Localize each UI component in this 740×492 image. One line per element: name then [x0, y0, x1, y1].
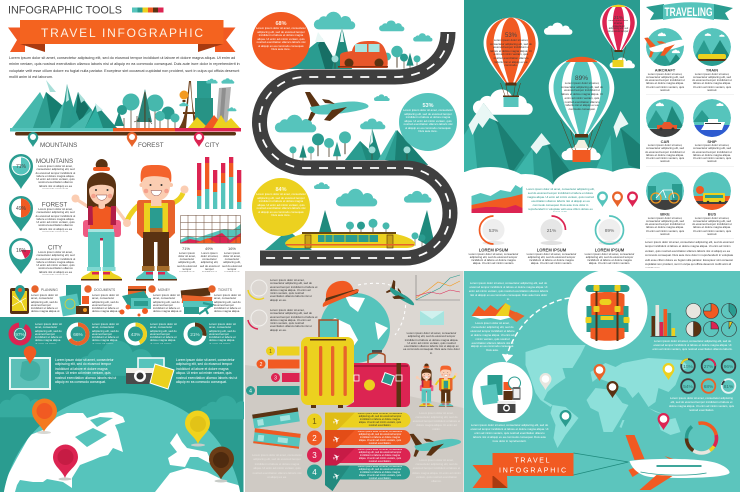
icon: plane: [305, 92, 369, 121]
bar chart: [650, 305, 676, 337]
legend: forest: FOREST: [138, 142, 164, 149]
balloon: 53%: [483, 18, 538, 107]
step 3: [307, 448, 411, 468]
item: planning: PLANNING: [41, 288, 58, 292]
horizontal bar 1: [266, 346, 300, 356]
icon: passports: [59, 285, 89, 316]
panel: balloons: [464, 0, 640, 265]
colour swatch bar: [132, 8, 164, 12]
horizontal bar 2: 2: [260, 362, 263, 368]
label: aircraft: AIRCRAFT: [655, 68, 676, 72]
mini area chart: [471, 303, 524, 322]
icon: train: [285, 232, 415, 248]
heading: forest: FOREST: [42, 202, 67, 208]
panel: luggage and tips: [245, 271, 464, 492]
donut grid: 81%: [723, 384, 734, 390]
horizontal bar 1: 1: [269, 349, 272, 355]
icon: framed map with pin: [10, 346, 50, 389]
donut grid: [681, 359, 735, 393]
map pin: orange: [612, 191, 622, 207]
text block: lower left: Lorem ipsum dolor sit amet, consectetur adipiscing elit, sed do eiusmod tempor incididunt ut labore et dolore magna aliqua. Ut enim ad minim veniam, quis nostrud exercitation ullamco laboris nisi ut aliquip ex ea.: [252, 453, 302, 479]
pin chart: forest 49%: 49%: [16, 206, 27, 212]
icon circle: aircraft: [644, 28, 684, 66]
caption: first lorem ipsum: [468, 248, 518, 270]
illustration: middle scenery: [275, 94, 428, 165]
illustration: globe: [0, 393, 245, 492]
dial: 53%: [479, 216, 504, 245]
illustration: top scenery: [283, 12, 432, 69]
item: documents: [84, 285, 121, 314]
item: money: [148, 285, 182, 314]
title ribbon: [8, 20, 236, 52]
panel: road journey: [252, 12, 458, 266]
info circle: 68%: [252, 12, 310, 70]
icon: airliner: [410, 430, 462, 457]
road: [260, 32, 450, 258]
horizontal bar 4: 4: [249, 388, 252, 394]
section: teal world panel: [0, 317, 255, 492]
icon: small plane: [384, 280, 418, 311]
area chart: [471, 185, 522, 213]
progress ring: yellow: [248, 280, 267, 299]
pie grid: [686, 304, 736, 336]
dial: 21%: 21%: [546, 228, 557, 234]
icon: yellow suitcase: [301, 320, 354, 408]
step 3: 3: [312, 451, 317, 460]
info circle: 84%: [252, 178, 310, 236]
pin chart: mountains 71%: [9, 154, 33, 189]
icon circle: ship: [693, 99, 731, 137]
dial: 21%: [540, 216, 565, 245]
caption: second lorem ipsum: LOREM IPSUM: [536, 248, 566, 252]
legend: city: [194, 132, 220, 149]
traveling ribbon: TRAVELING: [664, 7, 713, 19]
donut: 97%: 97%: [15, 332, 26, 338]
icon: red suitcase: [346, 350, 410, 407]
caption: first lorem ipsum: LOREM IPSUM: [478, 248, 508, 252]
label: bike: BIKE: [660, 212, 670, 216]
travel infographic banner: INFOGRAPHIC: [498, 468, 566, 474]
illustration: two travellers: [72, 159, 188, 280]
donut grid: 96%: [723, 364, 734, 370]
stat: 16%: 16%: [228, 246, 236, 251]
map pin: yellow: [185, 410, 210, 446]
donut: 21%: [186, 324, 204, 344]
heading: infographic tools: INFOGRAPHIC TOOLS: [8, 4, 122, 16]
info circle: 84%: 84%: [275, 187, 287, 193]
item: planning: [31, 285, 61, 314]
item: money: MONEY: [158, 288, 171, 292]
area chart with grid: [180, 215, 241, 244]
map pin: yellow: [662, 363, 674, 380]
balloon: 53%: 53%: [504, 33, 517, 39]
map pin: orange: [593, 364, 605, 381]
info circle: 53%: [399, 93, 457, 151]
dial: 89%: [595, 216, 623, 245]
donut grid: 15%: [683, 364, 693, 370]
illustration: globe with route: [320, 283, 406, 363]
donut grid: 54%: [683, 384, 693, 390]
map pin: red: [657, 413, 669, 430]
icon circle: bike: [646, 172, 684, 210]
illustration: forest: [114, 89, 180, 128]
illustration: small travellers: [416, 363, 457, 407]
horizontal bar 4: [246, 386, 300, 395]
icon: orange and white airplane: [625, 435, 729, 490]
illustration: mountains: [464, 103, 640, 185]
donut: 97%: [8, 322, 32, 346]
step 2: 2: [312, 434, 317, 443]
balloon: 89%: 89%: [574, 75, 588, 82]
donut: 43%: [126, 324, 145, 344]
panel: traveling modes: [644, 2, 734, 268]
pin chart: forest 49%: [9, 196, 33, 232]
dashed arrow: [502, 298, 569, 361]
text block: upper right white: Lorem ipsum dolor sit amet, consectetur adipiscing elit, sed do eiusmod tempor incididunt ut labore et dolore magna aliqua. Ut enim ad minim.: [413, 411, 460, 431]
icon: camera and photos: [126, 358, 174, 389]
step 2: ✈: [331, 433, 342, 446]
map pin: red: [627, 191, 637, 207]
stacked bar chart: [197, 157, 241, 209]
map pin: orange: [32, 398, 57, 434]
balloon: 89%: [548, 57, 614, 162]
item: tickets: [208, 285, 242, 314]
step 1: 1: [312, 417, 317, 426]
legend: city: CITY: [205, 142, 220, 149]
info circle: 68%: 68%: [275, 21, 287, 27]
icon: money: [120, 286, 151, 316]
horizontal bar 2: [256, 360, 300, 368]
donut grid: 68%: [703, 384, 714, 390]
progress ring: red: [248, 310, 267, 329]
label: car: CAR: [661, 139, 669, 144]
stat: 49%: 49%: [205, 246, 213, 251]
label: ship: SHIP: [707, 139, 717, 144]
illustration: bottom scenery: [265, 182, 436, 250]
panel: travel infographic overview: [0, 4, 244, 492]
pin chart: city 16%: [9, 238, 33, 274]
label: bus: BUS: [708, 212, 717, 216]
caption: third lorem ipsum: LOREM IPSUM: [594, 248, 624, 252]
icon: envelope: [420, 311, 444, 325]
icon: tickets: [181, 287, 213, 314]
circle: backpack: [567, 270, 647, 350]
ground band: [10, 128, 241, 136]
step 4: 4: [312, 468, 317, 477]
heading: mountains: MOUNTAINS: [36, 158, 73, 165]
circle: travel documents: [472, 362, 532, 422]
info circle: 53%: 53%: [422, 103, 434, 109]
map pin: brown: [606, 381, 618, 398]
item: documents: DOCUMENTS: [94, 288, 116, 292]
step 4: [307, 464, 410, 491]
icon: car: [338, 41, 388, 68]
map pin: brown: [209, 446, 234, 482]
step 4: ✈: [331, 470, 342, 483]
pin chart: mountains 71%: 71%: [16, 164, 27, 170]
text block: lower right white: Lorem ipsum dolor sit amet, consectetur adipiscing elit, sed do eiusmod tempor incididunt ut labore et dolore magna aliqua. Ut enim ad minim veniam, quis nostrud exercitation ullamco.: [412, 458, 461, 483]
step 2: [307, 430, 411, 450]
cloud band: [443, 167, 660, 270]
map pin: light teal: [597, 191, 607, 207]
dial: 89%: 89%: [604, 228, 615, 234]
legend: forest: [127, 132, 164, 149]
caption: second lorem ipsum: [526, 248, 576, 270]
step 3: ✈: [331, 451, 342, 464]
ribbon title text: TRAVEL INFOGRAPHIC: [41, 26, 203, 40]
map pin: red: [53, 444, 78, 480]
map pin: teal: [559, 410, 571, 427]
icon circle: car: [646, 99, 684, 137]
illustration: mountains: [12, 80, 117, 128]
caption: third lorem ipsum: [584, 248, 634, 270]
travel infographic banner: [472, 453, 573, 488]
donut: 66%: [68, 324, 88, 344]
intro paragraph: Lorem ipsum dolor sit amet, consectetur adipiscing elit, sed do eiusmod tempor incididunt ut labore et dolore magna aliqua. Ut enim ad minim veniam, quis nostrud exercitation ullamco laboris nisi ut aliquip ex ea commodo consequat. Duis aute irure dolor in reprehenderit in voluptate velit esse cillum dolore eu fugiat nulla pariatur. Excepteur sint occaecat cupidatat non proident, sunt in culpa qui officia deserunt mollit anim id est laborum.: [9, 56, 240, 79]
legend: mountains: MOUNTAINS: [40, 142, 77, 149]
pin chart: city 16%: 16%: [16, 248, 27, 254]
dial: 53%: 53%: [488, 228, 499, 234]
traveling ribbon: [646, 2, 733, 20]
icon: tablet map: [10, 285, 29, 314]
icon circle: train: [693, 28, 732, 67]
step 1: ✈: [331, 415, 342, 428]
legend: mountains: [28, 132, 77, 149]
illustration: city landmarks: [179, 78, 240, 128]
donut: 21%: 21%: [190, 332, 201, 338]
donut: 43%: 43%: [131, 332, 141, 338]
text block: map: Lorem ipsum dolor sit amet, consectetur adipiscing elit, sed do eiusmod tempor incididunt ut labore et dolore magna aliqua. Ut enim ad minim veniam, quis nostrud exercitation ullamco laboris nisi ut aliquip ex ea commodo consequat.: [55, 358, 116, 384]
balloon: 21%: 21%: [613, 15, 623, 20]
travel infographic banner: TRAVEL: [514, 458, 550, 464]
balloon: 21%: [600, 5, 636, 67]
step 1: [307, 412, 411, 433]
label: train: TRAIN: [706, 68, 718, 72]
map pin: white: [539, 373, 551, 390]
tow lines: [573, 453, 628, 475]
panel: world map: [464, 271, 740, 492]
stat: 71%: 71%: [182, 246, 190, 251]
heading: city: CITY: [48, 244, 63, 252]
horizontal bar 3: [271, 373, 300, 382]
donut grid: 27%: [703, 364, 714, 370]
line chart: [416, 275, 460, 300]
icon circle: bus: [693, 172, 731, 210]
icon: hat: [323, 281, 359, 307]
item: tickets: TICKETS: [218, 288, 233, 292]
segmented donut: [680, 417, 722, 459]
donut: 66%: 66%: [73, 332, 84, 338]
world map: [525, 345, 688, 448]
illustration: clouds behind balloons: [472, 23, 634, 160]
icon: boarding passes: [252, 407, 301, 449]
text block: camera: Lorem ipsum dolor sit amet, consectetur adipiscing elit, sed do eiusmod tempor incididunt ut labore et dolore magna aliqua. Ut enim ad minim veniam, quis nostrud exercitation ullamco laboris nisi ut aliquip ex ea commodo consequat.: [176, 358, 237, 384]
horizontal bar 3: 3: [274, 376, 277, 382]
